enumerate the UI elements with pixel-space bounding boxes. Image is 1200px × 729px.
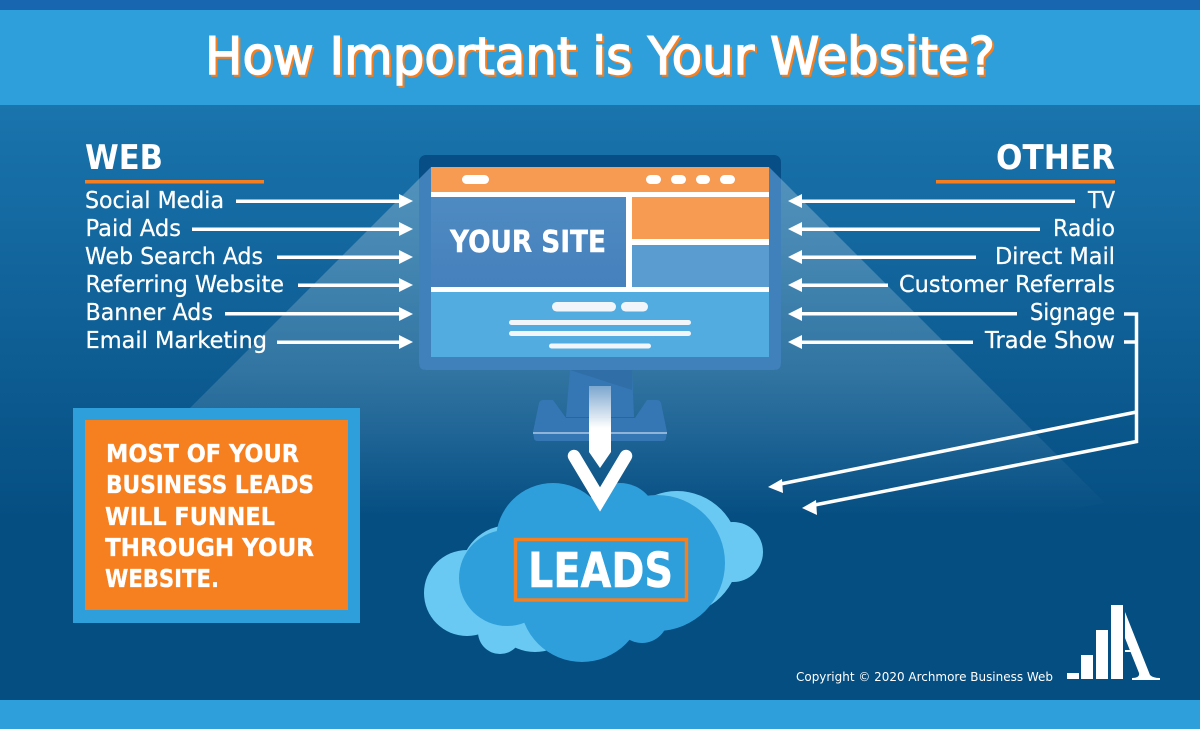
cloud back layer	[424, 491, 763, 654]
item: tv: TV	[1087, 188, 1115, 214]
arrows: web to site	[192, 194, 413, 349]
monitor stand	[533, 370, 667, 441]
header band	[0, 10, 1200, 105]
site footer block	[431, 292, 769, 357]
site orange block	[632, 197, 769, 239]
funnel arrow	[589, 386, 611, 468]
title: How Important is Your Website?	[205, 27, 995, 87]
logo	[1067, 605, 1160, 680]
monitor bezel	[419, 155, 781, 370]
heading rule: other	[936, 180, 1115, 184]
item: email marketing: Email Marketing	[86, 328, 267, 354]
callout text: WILL FUNNEL	[105, 502, 275, 531]
callout	[73, 408, 360, 623]
bottom band	[0, 700, 1200, 729]
monitor bezel lit area	[419, 167, 781, 370]
item: radio: Radio	[1053, 216, 1115, 242]
callout text: WEBSITE.	[105, 564, 219, 593]
leads box	[516, 540, 686, 600]
callout text	[105, 439, 314, 593]
screen white base	[431, 167, 769, 357]
heading: web: WEB	[85, 138, 163, 178]
screen header	[431, 167, 769, 192]
callout fill	[85, 420, 348, 610]
callout text: THROUGH YOUR	[105, 533, 314, 562]
panel: web sources	[85, 138, 413, 354]
funnel chevron	[574, 456, 626, 500]
callout text: MOST OF YOUR	[106, 439, 299, 468]
item: paid ads: Paid Ads	[86, 216, 181, 242]
arrows: other to site	[788, 194, 1075, 349]
leads cloud	[424, 483, 763, 662]
light beam	[95, 167, 1105, 515]
panel: other sources	[768, 138, 1136, 515]
item: referring website: Referring Website	[86, 272, 284, 298]
item: social media: Social Media	[85, 188, 224, 214]
site blue block	[632, 245, 769, 287]
your site label: YOUR SITE	[449, 225, 606, 260]
item: web search ads: Web Search Ads	[85, 244, 263, 270]
footer text lines	[509, 302, 691, 348]
copyright: Copyright © 2020 Archmore Business Web	[796, 670, 1053, 684]
callout frame	[73, 408, 360, 623]
top strip	[0, 0, 1200, 10]
item: customer referrals: Customer Referrals	[899, 272, 1115, 298]
item: trade show: Trade Show	[984, 328, 1115, 354]
monitor	[419, 155, 781, 441]
item: banner ads: Banner Ads	[86, 300, 213, 326]
site hero panel	[431, 197, 626, 287]
item: direct mail: Direct Mail	[995, 244, 1115, 270]
arrows: signage and trade show to leads	[768, 314, 1136, 515]
cloud front layer	[459, 483, 725, 662]
item: signage: Signage	[1030, 300, 1115, 326]
callout text: BUSINESS LEADS	[106, 470, 314, 499]
heading rule: web	[85, 180, 264, 184]
header nav pills	[462, 175, 735, 184]
leads label: LEADS	[528, 543, 673, 599]
heading: other: OTHER	[996, 138, 1115, 178]
